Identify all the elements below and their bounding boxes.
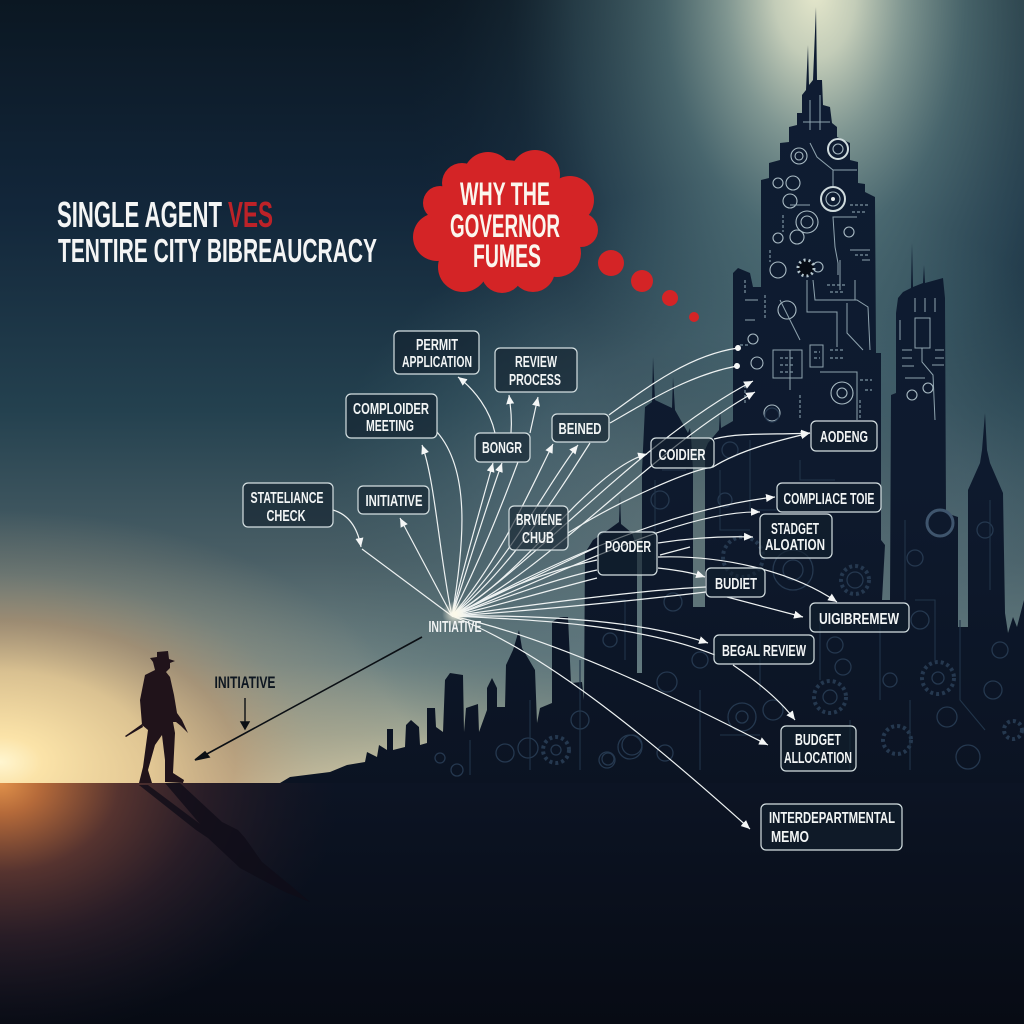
- flowchart labels: [243, 331, 909, 850]
- box: brviene chub: CHUB: [522, 530, 554, 547]
- agent silhouette with shadow: [125, 651, 310, 902]
- city skyline silhouette: [280, 7, 1024, 790]
- box: brviene chub: [509, 506, 568, 550]
- box: bongr: BONGR: [482, 440, 522, 457]
- box: initiative: INITIATIVE: [366, 493, 423, 510]
- box: coidier: COIDIER: [658, 447, 706, 464]
- box: review process: REVIEW: [515, 354, 558, 371]
- connector lines without heads: [362, 432, 715, 655]
- box: compliance meeting: MEETING: [366, 418, 414, 435]
- agent label: INITIATIVE: [214, 673, 276, 692]
- box: coidier: [651, 438, 714, 468]
- box: budiet: [706, 568, 765, 597]
- box: interdepartmental memo: [761, 804, 902, 850]
- small down arrow: [241, 698, 249, 729]
- box: aodeng: AODENG: [820, 429, 868, 446]
- skyline outline: [280, 7, 1024, 790]
- box: permit application: APPLICATION: [402, 354, 472, 371]
- box: compliance meeting: [346, 394, 437, 438]
- thought bubble: why the governor fumes: WHY THE: [460, 176, 550, 212]
- box: interdepartmental memo: INTERDEPARTMENTAL: [769, 810, 895, 827]
- box: interdepartmental memo: MEMO: [771, 829, 809, 846]
- title: TENTIRE CITY BIBREAUCRACY: [58, 232, 377, 269]
- box: stateliance check: CHECK: [266, 508, 306, 525]
- box: compliace toie: [777, 483, 881, 512]
- box: permit application: [394, 331, 479, 374]
- upper tower circuit traces: [740, 95, 944, 420]
- box: budget allocation: BUDGET: [795, 732, 841, 749]
- fan of arrows from initiative hub: [333, 348, 837, 829]
- box: brviene chub: BRVIENE: [516, 512, 562, 529]
- hub label: INITIATIVE: [428, 619, 482, 636]
- hub burst glow: [442, 601, 468, 627]
- box: begal review: [714, 635, 814, 664]
- thought bubble: why the governor fumes: [413, 150, 699, 322]
- box: initiative: [358, 486, 429, 514]
- box: compliace toie: COMPLIACE TOIE: [784, 491, 875, 508]
- box: pooder: POODER: [605, 539, 651, 556]
- box: stateliance check: [243, 483, 333, 527]
- title: [57, 194, 377, 269]
- thought bubble: why the governor fumes: GOVERNOR: [450, 208, 560, 244]
- box: pooder: [598, 532, 657, 575]
- box: budiet: BUDIET: [715, 576, 757, 593]
- box: review process: PROCESS: [509, 372, 561, 389]
- arrows ending in arrowheads: [333, 377, 837, 829]
- shadow: [139, 783, 310, 902]
- background sky: [0, 0, 1024, 790]
- box: beined: [552, 414, 609, 442]
- title: SINGLE AGENT: [57, 194, 222, 235]
- box: uigibremew: UIGIBREMEW: [819, 611, 900, 628]
- box: budget allocation: [781, 726, 856, 771]
- box: bongr: [475, 433, 530, 462]
- lower city gears: [435, 408, 1022, 776]
- arrows ending at dots: [609, 348, 738, 423]
- thought bubble: why the governor fumes: FUMES: [473, 238, 541, 274]
- box: budget allocation: ALLOCATION: [784, 750, 852, 767]
- box: permit application: PERMIT: [416, 337, 458, 354]
- ground: [0, 783, 1024, 1024]
- box: uigibremew: [810, 603, 909, 632]
- box: beined: BEINED: [558, 421, 602, 438]
- box: stateliance check: STATELIANCE: [250, 490, 324, 507]
- box: stadget aloation: ALOATION: [765, 537, 825, 554]
- upper tower circuit rings: [748, 139, 854, 421]
- box: stadget aloation: [760, 514, 832, 558]
- box: stadget aloation: STADGET: [771, 521, 819, 538]
- box: aodeng: [811, 421, 877, 451]
- box: review process: [495, 348, 577, 392]
- box: compliance meeting: COMPLOIDER: [353, 401, 429, 418]
- title: VES: [228, 194, 273, 235]
- figure: [125, 651, 188, 783]
- box: begal review: BEGAL REVIEW: [722, 643, 807, 660]
- black arrow towards agent: [195, 637, 422, 760]
